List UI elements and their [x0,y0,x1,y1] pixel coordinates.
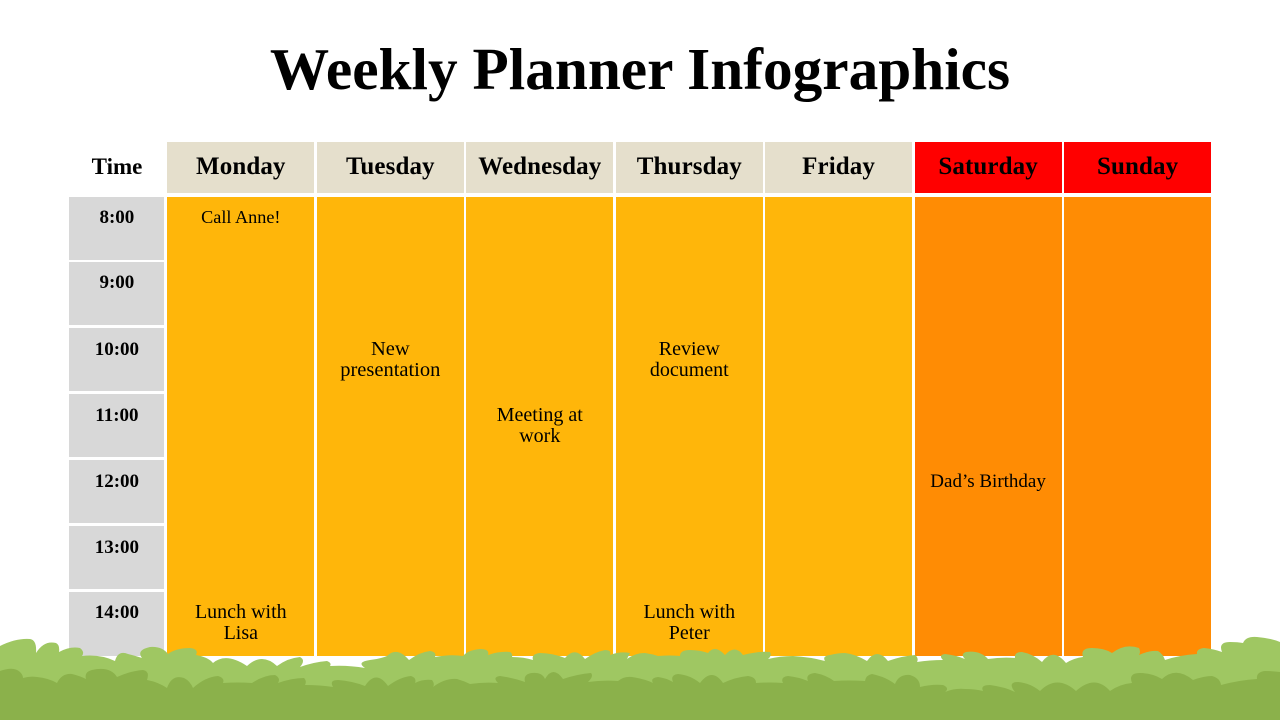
time slot 9:00: 9:00 [99,272,134,293]
header: Saturday: Saturday [938,153,1038,180]
event: Review document [650,338,729,380]
event: Lunch with Peter: Lunch with [643,600,735,622]
time slot 10:00: 10:00 [95,338,139,360]
header: Sunday: Sunday [1097,153,1178,180]
event: Meeting at work: Meeting at [497,404,583,426]
time slot 13:00: 13:00 [95,536,139,558]
event: Lunch with Peter [643,600,735,644]
column: Friday [765,196,912,656]
time slot 12:00: 12:00 [95,470,139,492]
time slot 11:00: 11:00 [95,404,139,426]
event: New presentation: presentation [340,358,440,380]
header: Saturday [915,142,1062,193]
header: Sunday [1064,142,1211,193]
column: Monday [167,196,314,656]
event: Call Anne: Call Anne! [201,206,280,226]
time slot 8:00 [69,196,164,260]
header: Friday: Friday [802,153,875,180]
header: Monday: Monday [196,153,286,180]
header: Wednesday: Wednesday [478,153,601,180]
event: Lunch with Lisa: Lunch with [195,600,287,622]
time slot 12:00 [69,460,164,523]
dark grass [0,669,1280,720]
time slot 14:00: 14:00 [95,602,139,623]
time slot 11:00 [69,394,164,457]
time slot 10:00 [69,328,164,391]
time slot 8:00: 8:00 [99,206,134,228]
event: Review document: document [650,358,729,380]
column: Saturday [915,196,1062,656]
event: Lunch with Lisa [195,600,287,644]
column: Thursday [616,196,763,656]
event: New presentation: New [371,338,410,360]
time slot 14:00 [69,592,164,656]
event: Dad's Birthday: Dad’s Birthday [930,470,1046,492]
header: Tuesday: Tuesday [346,153,435,180]
time slot 9:00 [69,262,164,325]
header: Thursday: Thursday [637,153,742,180]
header: Thursday [616,142,763,193]
grass illustration [0,636,1280,720]
column: Tuesday [317,196,464,656]
event: Lunch with Peter: Peter [669,622,710,644]
light grass [0,637,1280,720]
header: Wednesday [466,142,613,193]
column: Wednesday [466,196,613,656]
header: Friday [765,142,912,193]
event: Lunch with Lisa: Lisa [224,622,258,644]
column: Sunday [1064,196,1211,656]
event: Review document: Review [659,338,720,360]
event: Meeting at work [497,404,583,446]
header: Monday [167,142,314,193]
time slot 13:00 [69,526,164,589]
event: New presentation [340,338,440,380]
header: Tuesday [317,142,464,193]
title: Weekly Planner Infographics [270,36,1010,102]
event: Meeting at work: work [519,424,560,446]
time heading: Time [92,154,142,179]
